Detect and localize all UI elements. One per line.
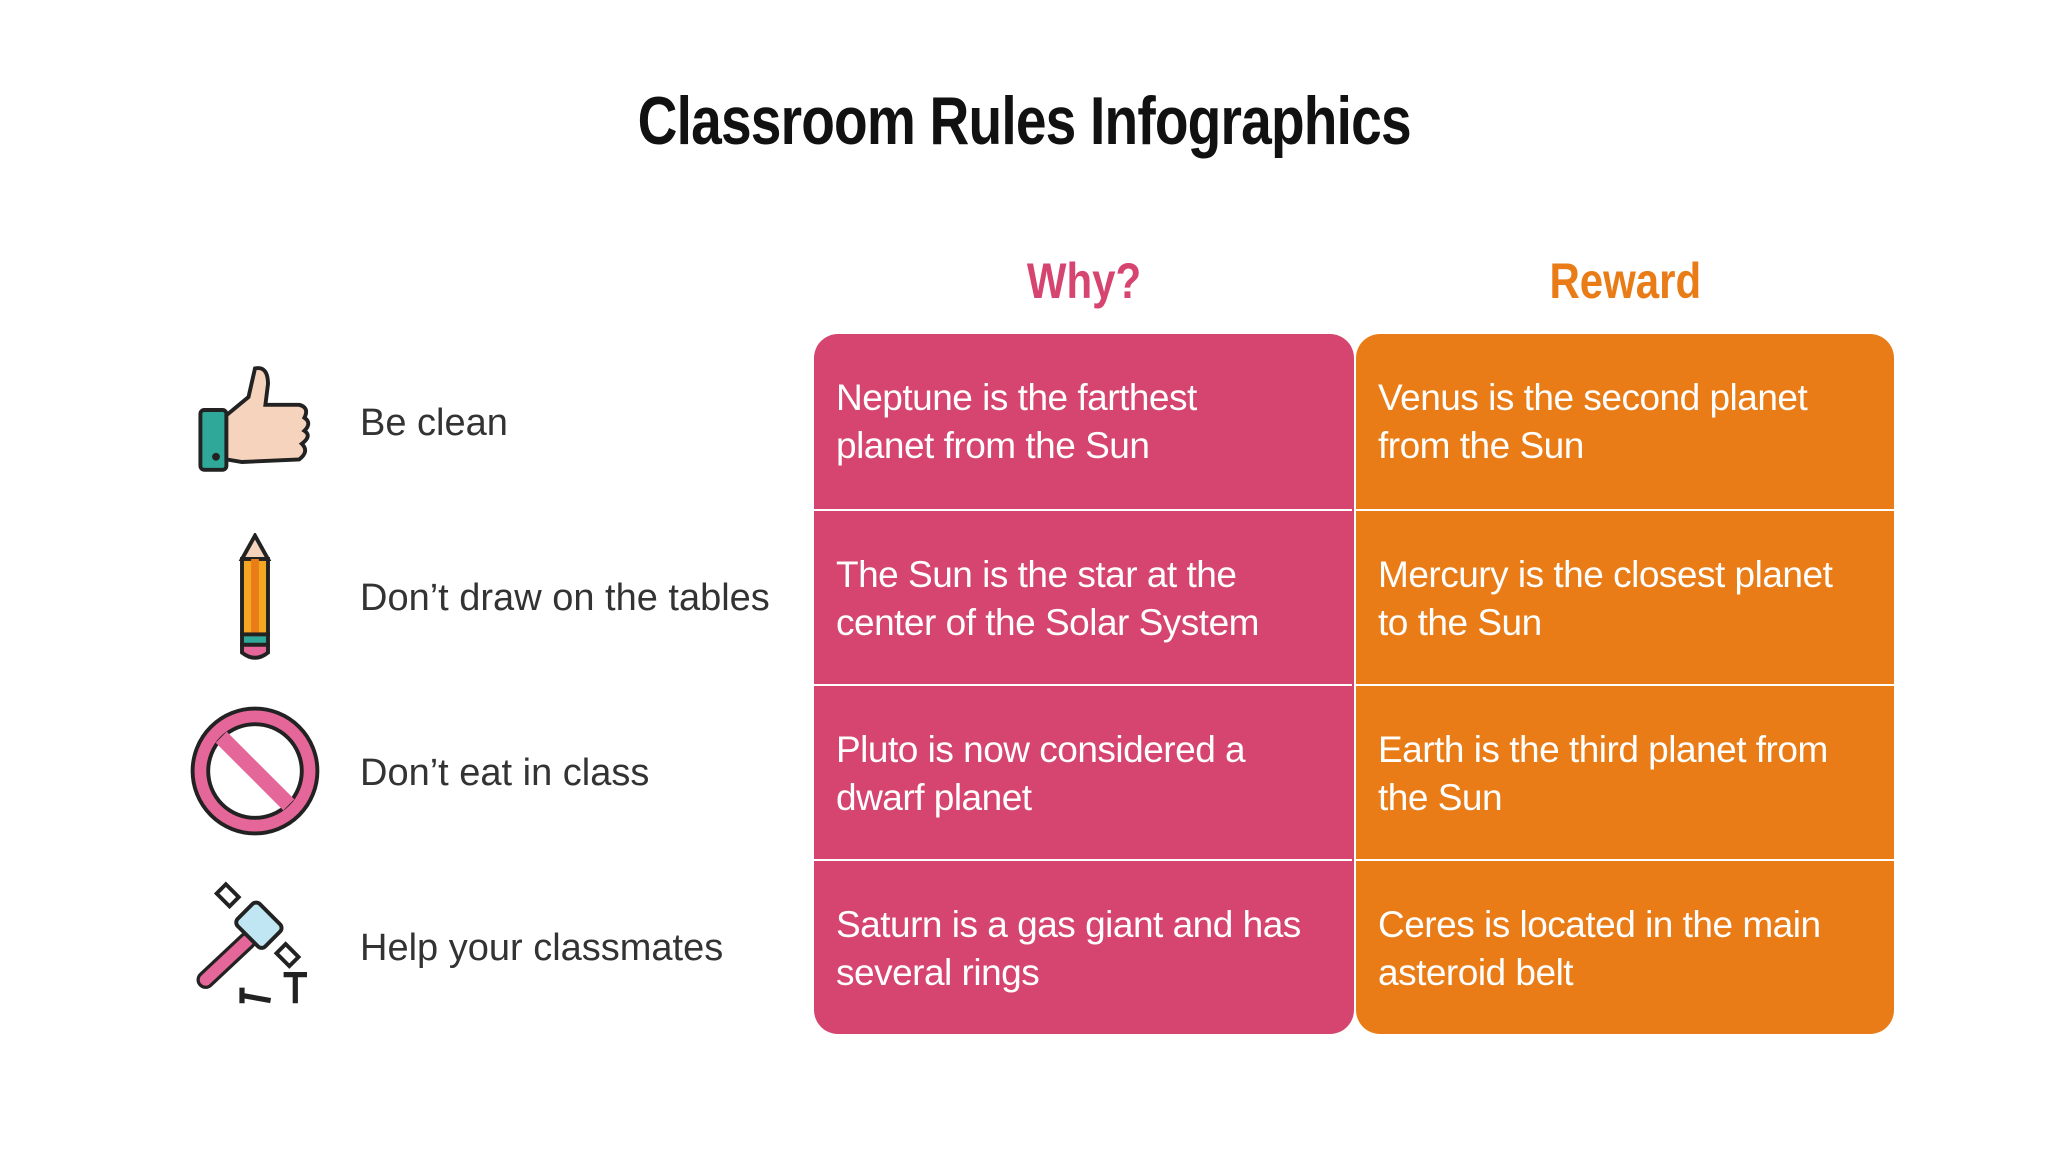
label: don't draw: Don’t draw on the tables <box>360 577 770 619</box>
why row 1: Neptune is the farthest <box>836 377 1197 418</box>
panel: reward column <box>1356 334 1894 1034</box>
why row 1 <box>836 377 1197 466</box>
reward row 4 <box>1356 859 1894 1034</box>
title: Classroom Rules Infographics <box>637 83 1411 159</box>
why row 2: The Sun is the star at the <box>836 554 1236 595</box>
why row 4: Saturn is a gas giant and has <box>836 904 1301 945</box>
icon: hammer <box>196 882 307 1004</box>
why row 3 <box>814 684 1352 859</box>
why row 1: planet from the Sun <box>836 425 1149 466</box>
header: reward: Reward <box>1549 253 1701 309</box>
why row 4 <box>814 859 1352 1034</box>
why row 2: center of the Solar System <box>836 602 1259 643</box>
why row 3: Pluto is now considered a <box>836 729 1245 770</box>
reward row 3 <box>1356 684 1894 859</box>
panel: why column <box>814 334 1354 1034</box>
icon: pencil <box>238 533 272 660</box>
why row 4: several rings <box>836 952 1039 993</box>
label: be clean: Be clean <box>360 402 508 444</box>
header: why: Why? <box>1027 253 1141 309</box>
reward row 4: Ceres is located in the main <box>1378 904 1821 945</box>
reward row 2 <box>1356 509 1894 684</box>
why row 3: dwarf planet <box>836 777 1032 818</box>
reward row 3: Earth is the third planet from <box>1378 729 1828 770</box>
why row 2 <box>814 509 1352 684</box>
reward row 3: the Sun <box>1378 777 1502 818</box>
icon: thumbs up <box>198 366 310 472</box>
label: help: Help your classmates <box>360 927 723 969</box>
reward row 2: Mercury is the closest planet <box>1378 554 1832 595</box>
reward row 1: from the Sun <box>1378 425 1584 466</box>
reward row 2: to the Sun <box>1378 602 1542 643</box>
label: don't eat: Don’t eat in class <box>360 752 649 794</box>
reward row 1 <box>1378 377 1808 466</box>
reward row 4: asteroid belt <box>1378 952 1573 993</box>
reward row 1: Venus is the second planet <box>1378 377 1807 418</box>
icon: no sign <box>190 706 320 836</box>
